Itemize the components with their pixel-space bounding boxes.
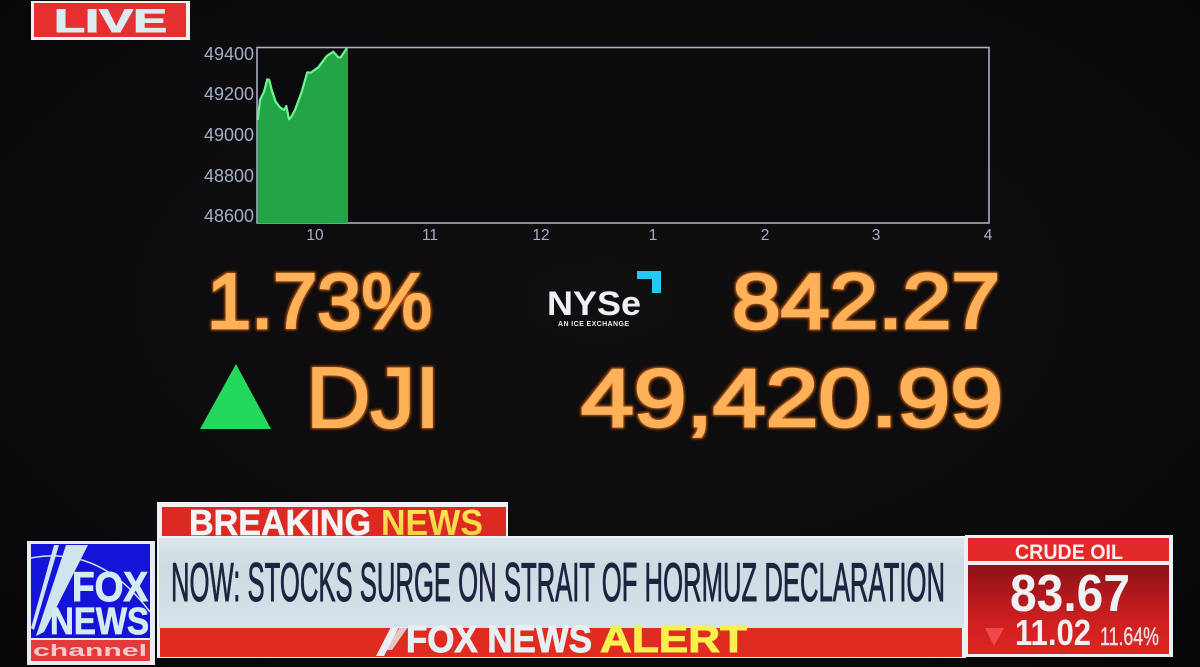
headline panel <box>157 536 966 658</box>
point change: 842.27 <box>732 257 1000 345</box>
Fox News Channel logo: NEWS <box>50 601 149 643</box>
NYSE logo: NYSe <box>547 285 641 323</box>
x axis labels: 2 <box>761 227 769 244</box>
NYSE logo <box>547 271 661 328</box>
y axis labels: 49000 <box>204 125 254 145</box>
x axis labels: 12 <box>532 227 550 244</box>
Fox News Channel logo: channel <box>33 641 147 660</box>
Fox News Alert bar: ALERT <box>600 619 747 661</box>
y axis labels: 48800 <box>204 166 254 186</box>
y axis labels: 48600 <box>204 206 254 226</box>
index value: 49,420.99 <box>581 353 1003 444</box>
x axis labels: 1 <box>649 227 657 244</box>
price line <box>258 48 347 120</box>
searchlights <box>31 545 59 630</box>
breaking news tab: BREAKING <box>189 502 371 543</box>
crude oil panel: CRUDE OIL <box>1015 541 1123 564</box>
Fox News Alert bar: FOX NEWS <box>406 619 592 661</box>
x axis labels: 11 <box>422 227 438 244</box>
crude oil header <box>968 538 1169 561</box>
down arrow <box>985 628 1004 646</box>
green area <box>258 48 348 223</box>
breaking news tab: NEWS <box>381 502 483 543</box>
line chart: DJI intraday <box>204 44 993 244</box>
x axis labels: 10 <box>306 227 324 244</box>
LIVE badge <box>31 1 190 40</box>
crude oil panel: 11.64% <box>1100 623 1159 651</box>
Fox News Alert bar <box>160 619 962 661</box>
x axis labels <box>306 227 993 244</box>
x axis labels: 3 <box>872 227 880 244</box>
y axis labels: 49400 <box>204 44 254 64</box>
y axis labels <box>204 44 254 226</box>
LIVE badge: LIVE <box>54 3 167 39</box>
Fox News Channel logo <box>27 541 155 665</box>
percent change: 1.73% <box>207 257 432 345</box>
crude oil panel: 11.02 <box>1015 612 1091 653</box>
y axis labels: 49200 <box>204 84 254 104</box>
crude oil body <box>968 565 1169 654</box>
Fox News Channel logo: FOX <box>72 563 148 610</box>
chart frame <box>257 48 989 223</box>
x axis labels: 4 <box>984 227 993 244</box>
crude oil panel: 83.67 <box>1010 565 1130 623</box>
NYSE logo: AN ICE EXCHANGE <box>558 321 629 328</box>
breaking news tab <box>157 502 508 543</box>
index name DJI: DJI <box>306 351 440 446</box>
up arrow triangle <box>200 364 271 429</box>
crude oil panel <box>965 535 1173 657</box>
